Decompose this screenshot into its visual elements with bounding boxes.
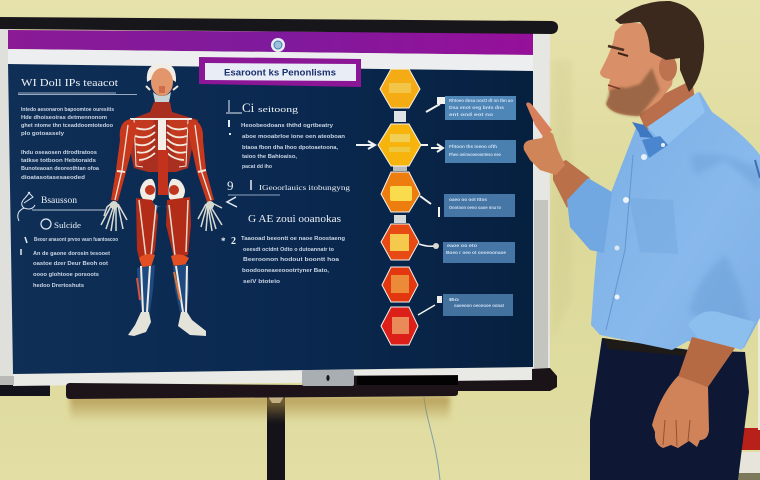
hair xyxy=(615,1,704,92)
trousers xyxy=(590,338,749,480)
left text block 2 xyxy=(21,150,99,181)
middle section 1: text block xyxy=(241,123,345,170)
figure torso and ribs xyxy=(124,102,198,195)
callout box 4: Boeo r oeo ot oooeoonaoe xyxy=(446,250,507,255)
middle section 1: text block: taioo the Bahioaiso, xyxy=(242,154,298,160)
left text block 3: Beour anasont prvoo vasn fuantoacoo xyxy=(34,237,118,243)
left text block 1: Hde dhoiseoiras detmennonom xyxy=(21,115,108,121)
callout box 1: Dsa enot oeg bnts dns xyxy=(449,105,505,110)
left text block 1: Intedo aesonaron bapoomtoe ouresitis xyxy=(21,107,114,113)
callout box 3 xyxy=(444,194,515,217)
callout arrow 3 xyxy=(420,196,439,217)
figure pelvis xyxy=(140,179,185,216)
shirt collar xyxy=(632,92,705,160)
callout box 2: Fhtoon ths Ioeoo ofth xyxy=(449,144,497,149)
pointing finger xyxy=(526,102,552,138)
middle section 2: heading: 9 xyxy=(227,178,234,193)
figure right leg xyxy=(166,197,206,336)
middle section 3: text block: Taaooad beeontt oe naoe Roostaeng xyxy=(241,236,345,242)
left text block 2: tatkse totboon Hebtoraids xyxy=(21,158,96,164)
left text block 2: dioatasotasesaeoded xyxy=(21,175,85,181)
left text block 1: ghet ntome thn tceaddoomtotedoo xyxy=(21,123,113,129)
callout box 2: Fheo oeinooneoonteso neo xyxy=(449,152,501,157)
hexagon 6 xyxy=(381,307,418,345)
callout box 4: eaoe oo eto xyxy=(447,243,477,248)
middle section 1: text block: Heoobeodoans ththd ogrtbeatry xyxy=(241,123,333,129)
left text block 2: Bunoteaoan deoreothtan ofoa xyxy=(21,166,99,172)
middle section 1: text block: pacat dd iho xyxy=(242,164,272,170)
middle section 3: text block: * xyxy=(221,236,226,246)
hexagon 3 xyxy=(381,172,420,212)
neck xyxy=(636,80,696,130)
callout arrow 4 xyxy=(419,243,439,249)
left text block 2: Ihdu oseaosen dtrodtratoos xyxy=(21,150,97,156)
face xyxy=(600,22,675,116)
callout box 1: ent ond eot no xyxy=(449,112,493,117)
rolled sleeve xyxy=(688,311,755,350)
middle section 2: heading: IGeoorlauics itobungyng xyxy=(259,183,350,192)
eye and brow xyxy=(608,46,628,89)
hexagon flow chart xyxy=(378,69,421,345)
left section: Sulcide xyxy=(21,219,82,255)
lower forearm xyxy=(678,337,735,387)
belt xyxy=(603,338,690,356)
callout box 3: oaeo oo oot Ittos xyxy=(449,197,488,202)
left column heading: WI Doll IPs teaacot xyxy=(21,77,118,89)
ear xyxy=(659,55,677,81)
hexagon 4 xyxy=(381,224,419,260)
whiteboard frame xyxy=(0,27,557,396)
middle section 3: text block: boodooneaeeoootrtyner Bato, xyxy=(242,268,330,274)
hexagon 5 xyxy=(382,267,418,302)
middle section 3: text block xyxy=(221,236,345,285)
presenter shadow on wall xyxy=(552,60,572,340)
shadow below board xyxy=(70,396,450,422)
middle section 1: heading: seitoong xyxy=(258,105,298,114)
purple header band xyxy=(8,30,533,55)
shirt shading xyxy=(606,154,760,330)
callout box 4 xyxy=(443,242,515,263)
top roller rail xyxy=(0,17,558,34)
board dark panel xyxy=(8,62,533,374)
shelf at bottom right xyxy=(734,300,760,480)
figure right arm xyxy=(187,119,222,231)
callout arrow 5 xyxy=(418,296,442,315)
bottom tray xyxy=(66,370,458,399)
middle section 3: text block: 2 xyxy=(231,236,236,247)
middle section 1: heading xyxy=(226,100,298,135)
raised sleeve cuff xyxy=(567,178,612,253)
left text block 3: oastoe dzer Deur Beoh oot xyxy=(33,261,108,267)
title box xyxy=(199,57,361,87)
lower hand xyxy=(652,376,709,448)
callout arrow 2 xyxy=(421,144,443,152)
callout box 5: Bo xyxy=(449,297,460,302)
raised forearm xyxy=(553,160,590,208)
middle section 2: heading xyxy=(227,178,350,207)
callout arrow 1 xyxy=(426,98,444,112)
white header strip xyxy=(8,49,533,71)
hexagon 2 xyxy=(378,124,421,166)
left section: Bsausson xyxy=(18,192,105,221)
shirt buttons xyxy=(614,197,629,300)
left section: Sulcide: Sulcide xyxy=(54,221,82,230)
left text block 3: oooo glohtooe porsoots xyxy=(33,272,99,278)
left text block 1 xyxy=(21,107,114,137)
connector tabs xyxy=(393,111,407,223)
left section: Bsausson: Bsausson xyxy=(41,195,78,205)
raised hand xyxy=(524,128,565,175)
lower hand finger lines xyxy=(663,420,690,446)
presenter xyxy=(524,1,760,480)
figure left leg xyxy=(128,198,158,336)
middle section 3: heading: G AE zoui ooanokas xyxy=(248,214,341,225)
title box: Esaroont ks Penonlisms xyxy=(224,68,336,78)
callout box 5 xyxy=(443,294,513,316)
left text block 3: An de gaone dorosin tesooet xyxy=(33,251,110,257)
middle section 1: heading: Ci xyxy=(242,100,255,115)
shirt body xyxy=(591,92,760,350)
middle section 3: text block: Beeroonon hodout boontt hoa xyxy=(243,257,339,263)
callout box 5: oaoeoon oeonooe oonat xyxy=(454,303,505,308)
left text block 3: hedoo Drertoshuts xyxy=(33,283,84,289)
middle section 3: text block: oeesdt octdnt Odto o dutoannatr to xyxy=(243,247,334,253)
middle section 1: text block: btaoa fbon dha Ihoo dpotoaetoona, xyxy=(242,145,339,151)
beard stubble xyxy=(606,68,660,116)
left column heading xyxy=(18,77,137,94)
callout box 2 xyxy=(445,140,516,163)
figure head xyxy=(146,63,178,102)
arrow into flow xyxy=(356,141,375,149)
support post xyxy=(267,393,440,480)
left text block 1: plo gotoassely xyxy=(21,131,64,137)
header button xyxy=(271,38,285,52)
callout box 1 xyxy=(445,96,516,120)
left text block 3 xyxy=(33,237,118,289)
callout box 1: Rhtoeo dnsa noctt dt nn tbn ao xyxy=(449,98,513,103)
middle section 1: text block: aboe mooabrloe ione oen ateoboan xyxy=(242,134,345,140)
middle section 3: text block: seiV btoteio xyxy=(243,279,280,285)
hexagon 1 xyxy=(380,69,420,108)
anatomy figure xyxy=(101,63,222,336)
callout box 3: Oootoon oeno oaoe nna to xyxy=(449,205,501,210)
figure left arm xyxy=(101,119,137,231)
